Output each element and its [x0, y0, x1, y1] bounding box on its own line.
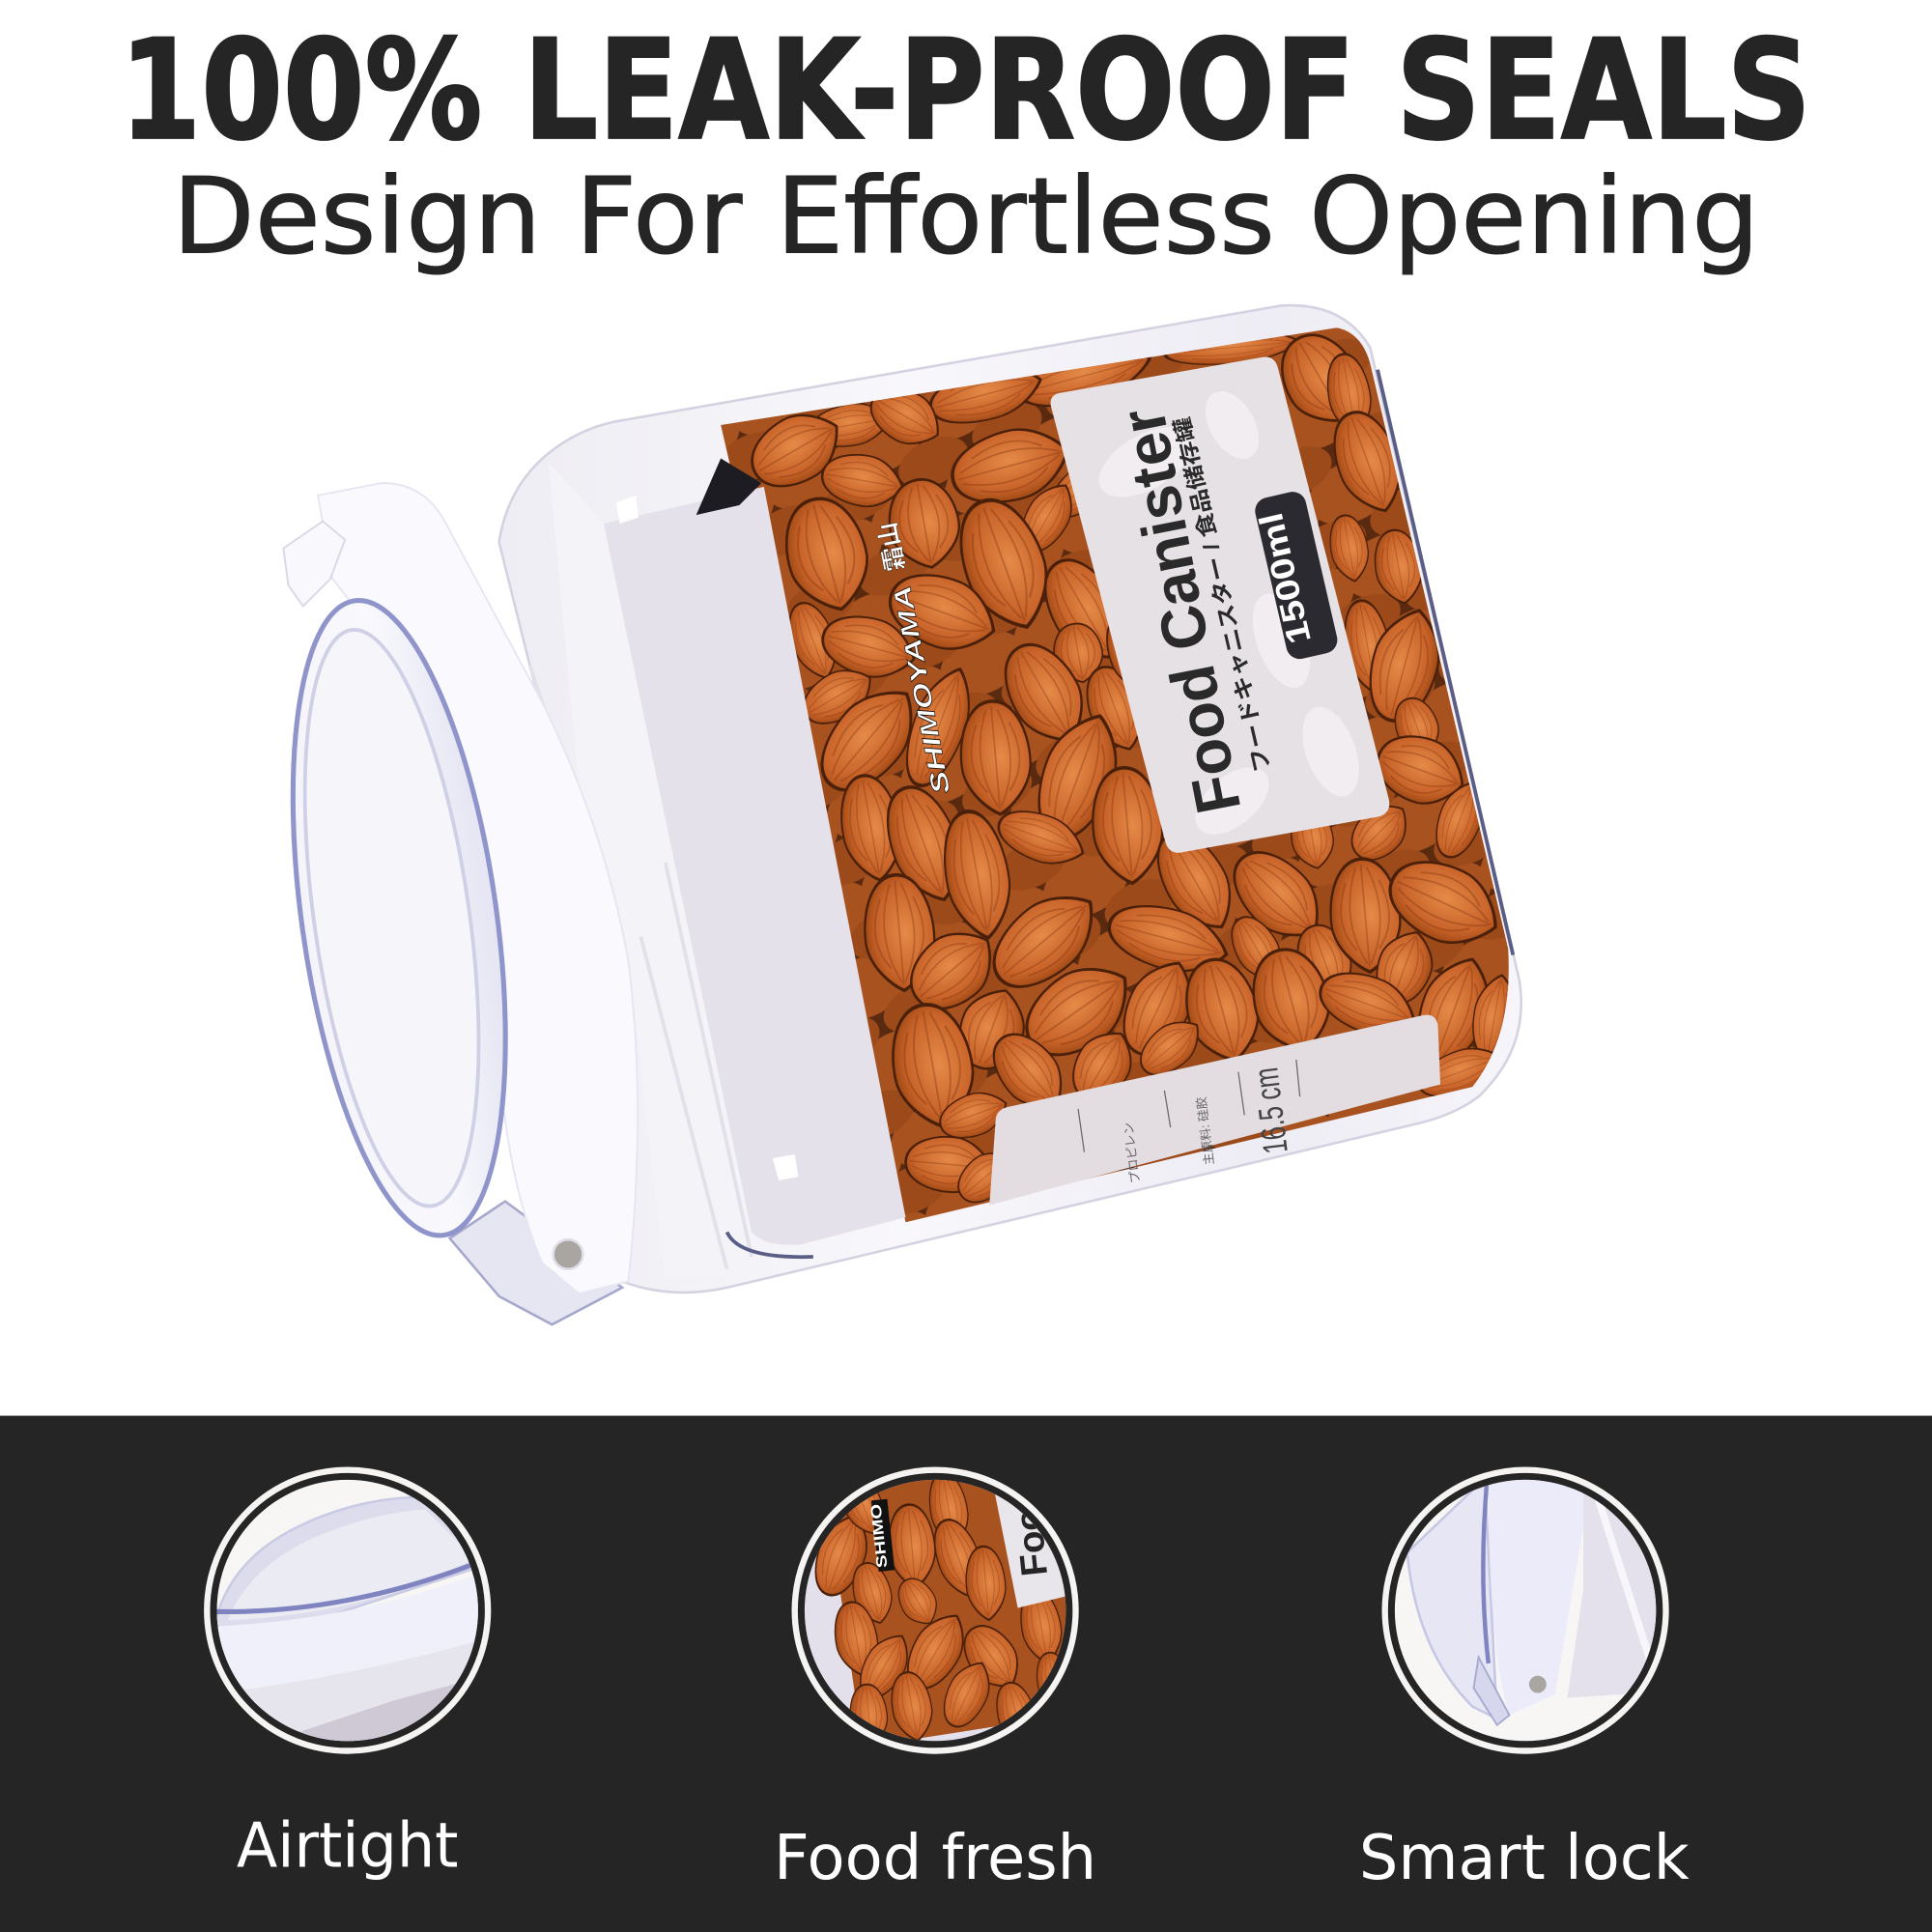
subtitle: Design For Effortless Opening — [173, 155, 1759, 277]
capacity pill — [1253, 489, 1340, 662]
circle ring — [795, 1470, 1076, 1750]
clear glass streaks — [529, 666, 752, 1269]
brand mark: SHIMOYAMA — [889, 583, 955, 796]
lid white ring — [318, 483, 638, 1293]
lid latch tab — [283, 522, 345, 607]
lid hinge — [450, 1202, 622, 1324]
brand mark kanji: 霜山 — [874, 520, 910, 573]
feature: food fresh — [774, 1466, 1096, 1894]
label subtitle: フードキャニスター / 食品储存罐 — [1170, 414, 1275, 775]
spec lines — [1078, 1060, 1300, 1152]
dark feature band — [0, 1416, 1932, 1932]
circle image: latch close-up — [1395, 1480, 1656, 1741]
latch hole — [554, 1239, 582, 1269]
front label: Food Canister — [1051, 356, 1389, 853]
dark gap above band — [696, 458, 761, 515]
white band label — [604, 487, 906, 1245]
capacity text: 1500ml — [1253, 509, 1319, 647]
label panel — [1051, 356, 1389, 853]
jar glass body — [499, 305, 1521, 1293]
circle ring — [1385, 1470, 1665, 1750]
product: food canister jar — [258, 296, 1552, 1324]
circle image: almond close-up: SHIMO — [867, 1503, 891, 1569]
spec text: プロピレン — [1121, 1122, 1143, 1184]
label almond watermark — [1088, 382, 1370, 847]
clear lid inner rim — [274, 619, 509, 1217]
circle image: lid close-up — [216, 1480, 478, 1741]
bottom info label — [989, 1015, 1440, 1205]
label: Smart lock — [1359, 1823, 1690, 1894]
info panel — [989, 1015, 1440, 1205]
feature: airtight — [207, 1470, 488, 1882]
circle ring — [207, 1470, 488, 1750]
label: Food fresh — [774, 1823, 1096, 1894]
almond printed wrap — [721, 327, 1509, 1223]
almonds — [739, 321, 1522, 1212]
jar glass reflections — [549, 462, 752, 1282]
clear lid — [258, 587, 540, 1249]
label name: Food Canister — [1106, 403, 1254, 819]
dark inner edge — [727, 370, 1513, 1257]
size text: 16.5 cm — [1246, 1065, 1295, 1156]
band corner glints — [616, 496, 799, 1180]
label: Airtight — [237, 1810, 458, 1882]
feature: smart lock — [1359, 1470, 1690, 1894]
material text: 主原料: 硅胶 — [1194, 1095, 1216, 1166]
circle image: almond close-up: Foo — [1008, 1506, 1056, 1578]
circle image: almond close-up — [804, 1480, 1066, 1741]
